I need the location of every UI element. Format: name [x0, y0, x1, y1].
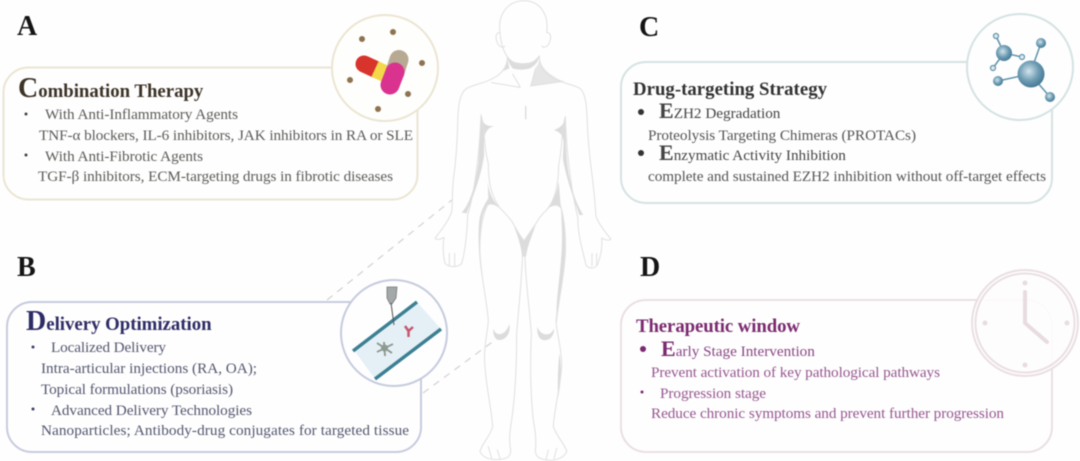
- panel C box: [621, 62, 1052, 203]
- panel C text block: complete and sustained EZH2 inhibition without off-target effects: [648, 168, 1046, 185]
- panel C: drug-targeting strategy: [621, 12, 1073, 203]
- panel C text block: ZH2 Degradation: [674, 105, 781, 122]
- body outline: [435, 1, 611, 460]
- panel A: combination therapy: [4, 11, 438, 200]
- panel C text block: Proteolysis Targeting Chimeras (PROTACs): [648, 127, 916, 144]
- panel B heading: elivery Optimization: [46, 314, 212, 335]
- icon: needle injecting into tissue in circle: [341, 280, 447, 386]
- panel B text block: Topical formulations (psoriasis): [41, 381, 233, 398]
- panel D text block: Prevent activation of key pathological pathways: [651, 364, 940, 381]
- panel C text block: E: [659, 98, 674, 123]
- panel B box: [7, 302, 421, 452]
- panel B text block: Nanoparticles; Antibody-drug conjugates for targeted tissue: [41, 422, 409, 439]
- connector: dashed line from wrist to panel B: [327, 200, 452, 300]
- icon: capsules in circle: [332, 15, 438, 121]
- icon: clock: [972, 270, 1078, 376]
- panel A text block: TGF-β inhibitors, ECM-targeting drugs in fibrotic diseases: [38, 168, 393, 185]
- panel B text block: Intra-articular injections (RA, OA);: [41, 360, 257, 377]
- panel B text block: [32, 339, 409, 439]
- panel C text block: E: [659, 140, 674, 165]
- panel A heading: ombination Therapy: [38, 81, 204, 102]
- panel A box: [4, 68, 418, 200]
- panel A heading: C: [18, 73, 38, 104]
- panel A text block: [24, 106, 413, 185]
- panel letter D: D: [640, 252, 660, 283]
- panel D: therapeutic window: [621, 252, 1078, 452]
- connector: dashed line from knee to panel B: [423, 340, 495, 393]
- panel letter B: B: [17, 252, 36, 283]
- body shading: [462, 56, 583, 397]
- panel letter C: C: [639, 12, 659, 43]
- panel B text block: Localized Delivery: [51, 339, 166, 356]
- panel A text block: TNF-α blockers, IL-6 inhibitors, JAK inhibitors in RA or SLE: [39, 127, 413, 144]
- panel D text block: Reduce chronic symptoms and prevent further progression: [651, 405, 1004, 422]
- panel letter A: A: [17, 11, 38, 42]
- panel B text block: Advanced Delivery Technologies: [51, 402, 252, 419]
- panel D text block: arly Stage Intervention: [676, 343, 815, 360]
- panel D text block: Progression stage: [660, 385, 766, 402]
- panel C text block: [638, 98, 1046, 185]
- panel B heading: D: [26, 306, 46, 337]
- panel C heading: Drug-targeting Strategy: [633, 79, 828, 100]
- panel A text block: With Anti-Fibrotic Agents: [45, 148, 203, 165]
- panel A text block: With Anti-Inflammatory Agents: [45, 106, 238, 123]
- panel B: delivery optimization: [7, 252, 447, 452]
- panel D text block: E: [661, 336, 676, 361]
- panel D box: [621, 300, 1052, 452]
- icon: molecule in circle: [967, 14, 1073, 120]
- human body figure: [435, 1, 611, 460]
- panel C text block: nzymatic Activity Inhibition: [674, 147, 846, 164]
- panel D heading: Therapeutic window: [636, 316, 800, 337]
- panel D text block: [640, 336, 1004, 422]
